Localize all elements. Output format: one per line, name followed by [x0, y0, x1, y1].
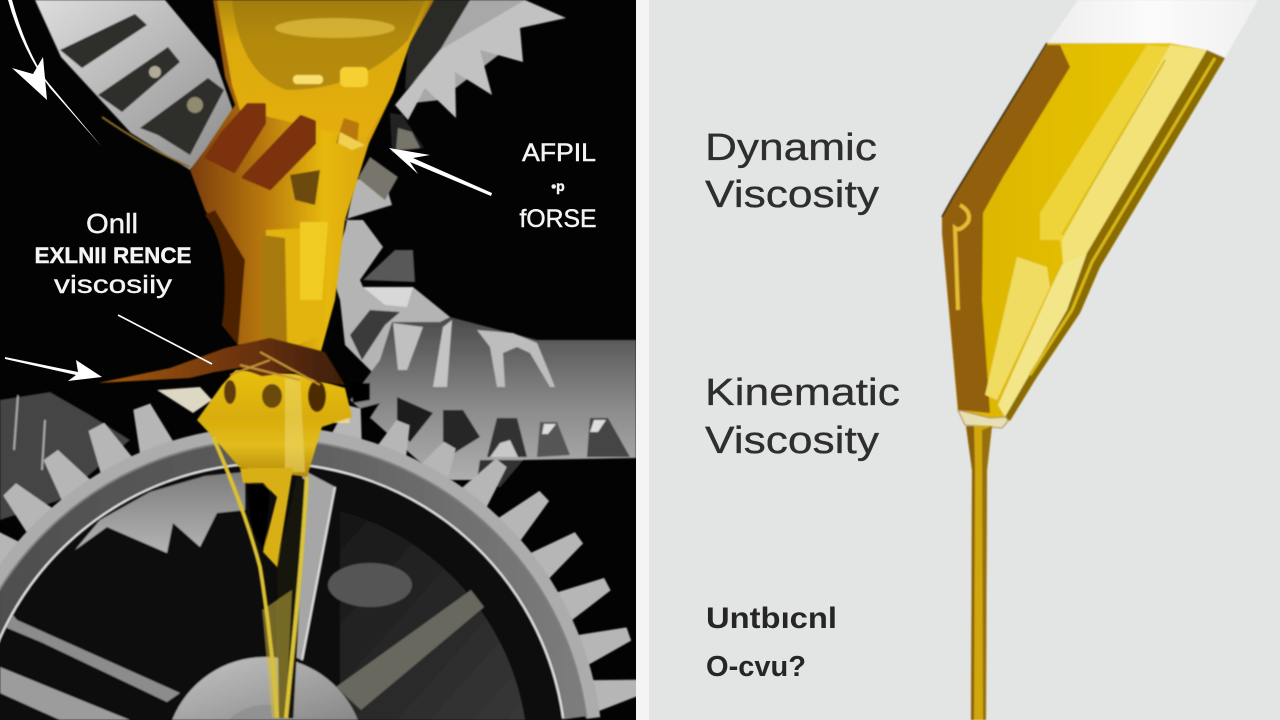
label: kinematic viscosity: Kinematic [705, 372, 900, 414]
arrow: top left curved [8, 0, 102, 147]
pipette: glass tip [1047, 0, 1258, 58]
label: oil influence viscosity: Onll [86, 208, 138, 239]
pipette with oil [942, 0, 1258, 428]
label: dynamic viscosity [705, 127, 879, 216]
gear: upper left with cut-outs [35, 0, 240, 170]
panel: right background [636, 0, 1280, 720]
left spokes [6, 615, 181, 704]
label: oil influence viscosity: EXLNII RENCE [34, 243, 192, 268]
panel: white divider strip [636, 0, 649, 720]
label: april force: fORSE [520, 205, 596, 233]
label: dynamic viscosity: Viscosity [705, 174, 879, 216]
oil: falling streams [213, 437, 307, 718]
lower dark tooth holes [360, 402, 380, 419]
right spoke [336, 590, 484, 710]
upper light teeth [393, 323, 423, 370]
gray toothed band [350, 317, 636, 487]
gear: upper hub and rim [358, 0, 566, 200]
pipette: brown shade band [942, 45, 1070, 413]
panel: left gears and oil illustration [0, 0, 646, 720]
gear: middle right [330, 172, 636, 487]
label: april force: •p [551, 178, 565, 194]
oil: central strip [262, 227, 328, 350]
pipette: dark right edge [1005, 50, 1225, 421]
right window [340, 511, 525, 720]
pipette: pale highlight bands [1040, 45, 1207, 263]
label: small unit text: O-cvu? [706, 651, 806, 683]
vertical spoke [295, 472, 336, 661]
pipette: oil body [942, 43, 1225, 421]
oil: upper cup colour [217, 0, 430, 140]
label: april force [520, 143, 596, 228]
label: oil influence viscosity: viscosiiy [54, 271, 173, 299]
dark gray patch [363, 250, 415, 282]
oil stream from pipette [966, 426, 992, 720]
gear: large front wheel [0, 400, 646, 720]
wheel teeth [0, 400, 646, 714]
upper left window gray piece [75, 472, 245, 553]
arrow: pointing to oil sheet [5, 357, 102, 381]
label: kinematic viscosity [705, 372, 900, 462]
label: small unit text: Untbıcnl [706, 602, 837, 635]
light zigzag gear [336, 178, 451, 372]
label: dynamic viscosity: Dynamic [705, 127, 877, 169]
label: small unit text [706, 602, 837, 683]
arrow: pointing to gear at right [389, 148, 492, 196]
hub [172, 657, 358, 720]
oil: brown sheet [98, 338, 345, 385]
label: april force: AFPIL [522, 139, 596, 167]
oil: top cup and neck [190, 0, 434, 355]
pipette: left edge highlights [955, 205, 969, 310]
label: kinematic viscosity: Viscosity [705, 420, 879, 462]
arrow: thin leader line [118, 315, 212, 364]
oil: brown finger runs [207, 105, 314, 188]
back gear lower left [0, 392, 130, 520]
oil: yellow crown [157, 370, 352, 477]
label: oil influence viscosity [34, 208, 192, 299]
pipette: collar [958, 410, 1008, 428]
